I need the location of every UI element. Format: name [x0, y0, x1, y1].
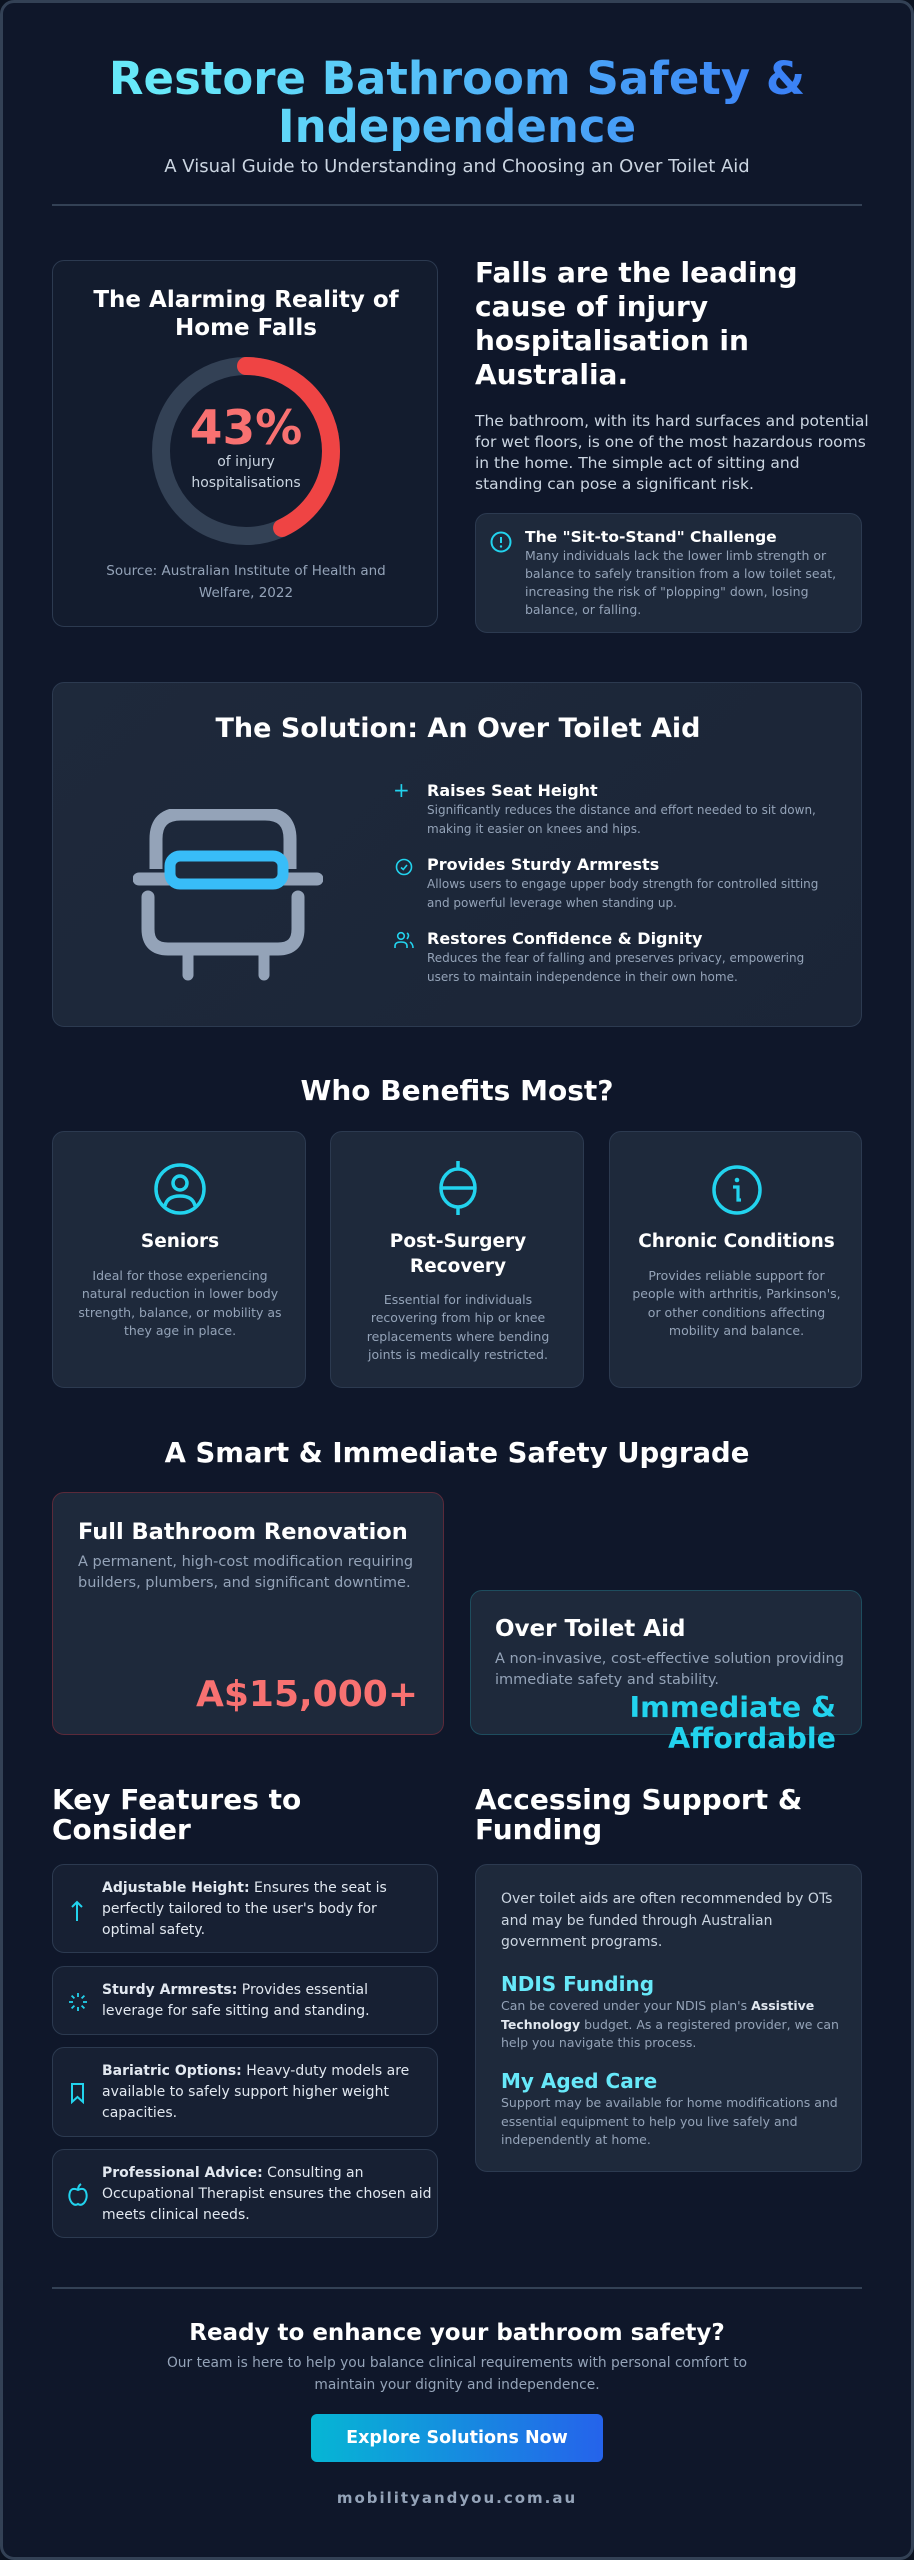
icon: over toilet aid — [133, 809, 323, 980]
falls paragraph: The bathroom, with its hard surfaces and potential for wet floors, is one of the most hazardous rooms in the home. The simple act of sitting and standing can pose a significant risk. — [475, 412, 869, 493]
CTA button: Explore Solutions Now — [346, 2428, 568, 2448]
description: Essential for individuals recovering from hip or knee replacements where bending joints is medically restricted. — [367, 1292, 549, 1362]
feature: raises seat height: Raises Seat Height — [427, 781, 598, 800]
icon: loader — [69, 1993, 87, 2011]
card: chronic — [609, 1131, 862, 1388]
card: renovation — [52, 1492, 444, 1735]
NDIS funding — [501, 1972, 839, 2050]
description: Ideal for those experiencing natural reduction in lower body strength, balance, or mobility as they age in place. — [78, 1268, 282, 1338]
title — [0, 55, 914, 151]
falls heading: Falls are the leading cause of injury hospitalisation in Australia. — [475, 256, 798, 391]
heading: key features: Key Features to — [52, 1783, 301, 1816]
heading: key features: Consider — [52, 1813, 191, 1846]
percentage label: hospitalisations — [191, 475, 301, 491]
subtitle: A Visual Guide to Understanding and Choosing an Over Toilet Aid — [164, 156, 750, 177]
feature: bariatric: Bariatric Options: Heavy-duty models are available to safely support higher weight capacities. — [102, 2063, 409, 2121]
feature: bariatric — [52, 2047, 438, 2137]
card: seniors — [52, 1131, 306, 1388]
percentage label — [191, 454, 301, 491]
heading: funding: Accessing Support & — [475, 1783, 802, 1816]
my aged care: My Aged Care — [501, 2069, 657, 2093]
CTA heading: Ready to enhance your bathroom safety? — [189, 2320, 725, 2346]
icon: alert — [490, 532, 512, 552]
feature: confidence: Restores Confidence & Dignity — [427, 929, 702, 948]
callout text: Many individuals lack the lower limb strength or balance to safely transition from a low toilet seat, increasing the risk of "plopping" down, losing balance, or falling. — [525, 548, 836, 617]
feature: raises seat height — [393, 778, 816, 836]
description: A permanent, high-cost modification requiring builders, plumbers, and significant downtime. — [78, 1554, 413, 1591]
stat heading: Home Falls — [175, 315, 317, 341]
icon: arrow up — [71, 1900, 83, 1921]
feature: sturdy armrests: Sturdy Armrests: Provides essential leverage for safe sitting and standing. — [102, 1982, 370, 2019]
icon: info — [712, 1165, 762, 1215]
title: Independence — [278, 100, 636, 153]
feature: adjustable height: Adjustable Height: Ensures the seat is perfectly tailored to the user's body for optimal safety. — [102, 1880, 387, 1938]
NDIS funding: Can be covered under your NDIS plan's Assistive Technology budget. As a registered provider, we can help you navigate this process. — [501, 1998, 839, 2050]
card: over toilet aid — [470, 1590, 862, 1735]
tagline — [630, 1691, 836, 1755]
heading: who benefits: Who Benefits Most? — [300, 1074, 614, 1107]
heading: funding: Funding — [475, 1813, 602, 1846]
percentage: 43% — [190, 401, 302, 456]
donut chart — [152, 357, 340, 545]
feature: professional advice: Professional Advice: Consulting an Occupational Therapist ensures the chosen aid meets clinical needs. — [102, 2165, 431, 2223]
feature: sturdy armrests — [52, 1966, 438, 2035]
stat heading — [93, 287, 399, 341]
my aged care — [501, 2069, 838, 2147]
title: Seniors — [141, 1231, 219, 1252]
heading: funding — [475, 1783, 802, 1846]
title — [390, 1231, 526, 1276]
icon: bookmark — [71, 2083, 84, 2104]
title: Post-Surgery — [390, 1231, 526, 1252]
tagline: Affordable — [668, 1722, 836, 1755]
stat heading: The Alarming Reality of — [93, 287, 399, 313]
feature: adjustable height — [52, 1864, 438, 1953]
heading: smart upgrade: A Smart & Immediate Safety Upgrade — [165, 1437, 749, 1469]
tagline: Immediate & — [630, 1691, 836, 1724]
feature: confidence: Reduces the fear of falling and preserves privacy, empowering users to maintain independence in their own home. — [427, 951, 804, 984]
source: Source: Australian Institute of Health and Welfare, 2022 — [106, 563, 386, 601]
footer url: mobilityandyou.com.au — [337, 2489, 577, 2507]
solution heading: The Solution: An Over Toilet Aid — [215, 713, 701, 744]
callout text: The "Sit-to-Stand" Challenge — [525, 528, 777, 546]
price: A$15,000+ — [196, 1674, 418, 1715]
my aged care: Support may be available for home modifications and essential equipment to help you live safely and independently at home. — [501, 2095, 838, 2147]
callout: sit-to-stand — [475, 513, 862, 633]
icon: plus: + — [393, 778, 410, 802]
feature: confidence — [394, 929, 804, 984]
CTA text: Our team is here to help you balance clinical requirements with personal comfort to maintain your dignity and independence. — [167, 2355, 747, 2393]
icon: joint — [439, 1161, 477, 1215]
intro text: Over toilet aids are often recommended by OTs and may be funded through Australian government programs. — [501, 1891, 832, 1950]
description: A non-invasive, cost-effective solution providing immediate safety and stability. — [495, 1651, 844, 1688]
heading: key features — [52, 1783, 301, 1846]
title: Over Toilet Aid — [495, 1616, 685, 1642]
title: Full Bathroom Renovation — [78, 1519, 408, 1545]
panel: solution — [52, 682, 862, 1027]
card: post-surgery — [330, 1131, 584, 1388]
NDIS funding: NDIS Funding — [501, 1972, 654, 1996]
feature: armrests: Allows users to engage upper body strength for controlled sitting and powerful leverage when standing up. — [427, 877, 818, 910]
panel: falls statistic — [52, 260, 438, 627]
icon: apple — [68, 2183, 88, 2206]
feature: armrests: Provides Sturdy Armrests — [427, 855, 659, 874]
panel: funding — [475, 1864, 862, 2172]
CTA button — [311, 2414, 603, 2462]
feature: raises seat height: Significantly reduces the distance and effort needed to sit down, making it easier on knees and hips. — [427, 803, 816, 836]
feature: professional advice — [52, 2149, 438, 2238]
icon: person — [154, 1163, 206, 1215]
icon: check — [396, 858, 412, 876]
title: Recovery — [410, 1256, 506, 1276]
percentage label: of injury — [217, 454, 275, 470]
title: Chronic Conditions — [638, 1231, 835, 1252]
description: Provides reliable support for people with arthritis, Parkinson's, or other conditions affecting mobility and balance. — [632, 1268, 841, 1338]
icon: people — [394, 932, 414, 948]
title: Restore Bathroom Safety & — [109, 52, 805, 105]
feature: armrests — [396, 855, 818, 910]
